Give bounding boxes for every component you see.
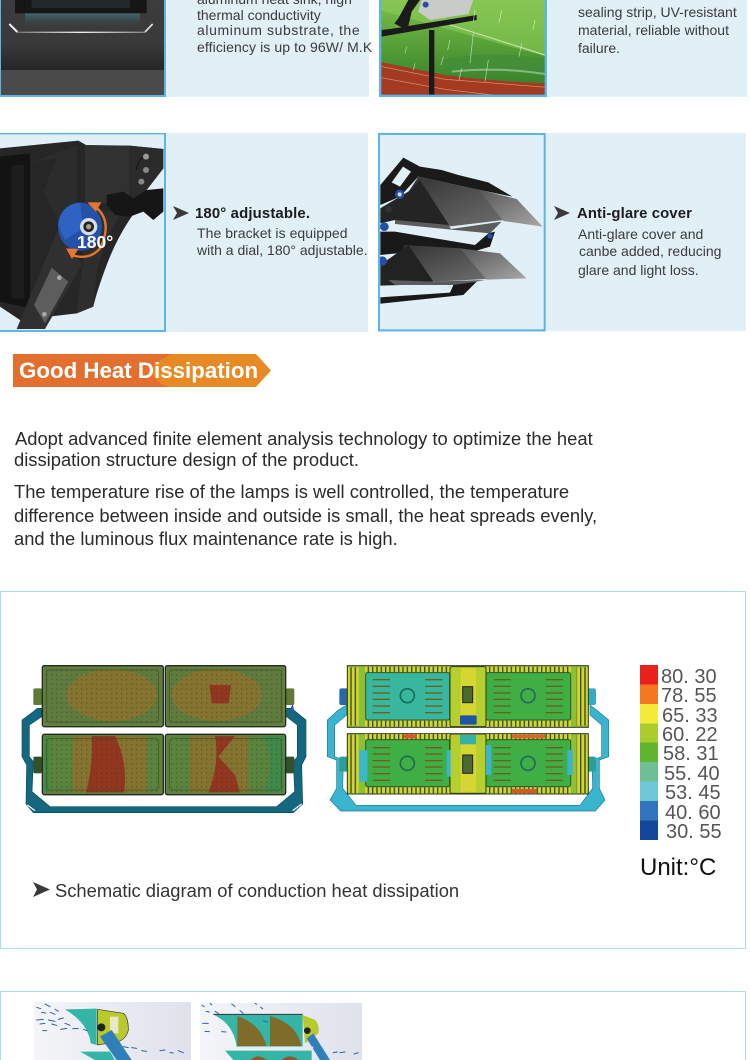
legend unit: Unit:°C [640,854,716,881]
text block: temperature rise: difference between inside and outside is small, the heat spreads evenly, [14,505,597,526]
image: airflow side view left [34,1002,191,1060]
legend: temperature scale: 78. 55 [661,685,717,707]
text background: anti-glare [544,133,746,331]
arrow: adjustable [173,206,189,220]
legend: temperature scale: 80. 30 [661,666,717,688]
text background: adjustable [165,133,368,332]
text: heat sink description: efficiency is up to 96W/ M.K. [197,39,372,55]
arrow: schematic caption [33,882,50,897]
text: waterproof description: sealing strip, UV-resistant [578,4,737,20]
panel: airflow simulation [0,991,746,1060]
text block: finite element analysis: Adopt advanced finite element analysis technology to optimize the heat [15,428,593,449]
legend color bar [640,665,658,840]
panel: heat sink feature [0,0,372,97]
heading banner: good heat dissipation [13,354,271,387]
panel: anti-glare cover [378,133,746,332]
banner title: Good Heat Dissipation [19,358,258,383]
panel: thermal simulation [0,591,746,949]
caption: schematic diagram: Schematic diagram of conduction heat dissipation [55,880,459,901]
text block: temperature rise [14,481,597,549]
text: heat sink description: thermal conductivity [197,7,321,23]
text: heat sink description [197,0,372,55]
image: lamp with glare shields [378,133,546,332]
panel: 180 degree adjustable [0,133,368,332]
label: 180 degrees on image: 180° [77,232,113,252]
text block: temperature rise: The temperature rise of the lamps is well controlled, the temperature [14,481,569,502]
text: heat sink description: aluminum substrate, the [197,22,360,38]
text block: temperature rise: and the luminous flux maintenance rate is high. [14,528,398,549]
image: bracket dial [0,133,166,332]
heading: 180 adjustable: 180° adjustable. [195,206,310,222]
text: anti-glare description [578,226,721,278]
heading: anti-glare cover: Anti-glare cover [577,206,692,222]
image: stadium in rain [379,0,547,97]
text block: finite element analysis: dissipation structure design of the product. [14,449,359,470]
text: anti-glare description: glare and light loss. [578,262,699,278]
text: anti-glare description: canbe added, reducing [579,243,721,259]
panel: waterproof feature [379,0,747,97]
text: waterproof description: material, reliable without [578,22,729,38]
text block: finite element analysis [14,428,593,470]
text: anti-glare description: Anti-glare cover and [578,226,703,242]
text: waterproof description [578,4,737,56]
chart: outer surface thermal map [22,665,306,813]
text background: waterproof [546,0,747,97]
legend: temperature scale: 30. 55 [666,821,722,843]
image: airflow side view right [200,1003,362,1060]
legend: temperature scale: 40. 60 [665,802,721,824]
legend: temperature scale [640,665,722,843]
legend: temperature scale: 60. 22 [662,724,718,746]
text: waterproof description: failure. [578,40,620,56]
text: adjustable description: The bracket is equipped [197,225,348,241]
text: adjustable description [197,225,368,258]
chart: inner structure thermal map [327,665,609,812]
arrow: anti-glare [554,206,570,220]
legend: temperature scale: 58. 31 [663,743,719,765]
legend: temperature scale: 53. 45 [665,782,721,804]
legend: temperature scale: 65. 33 [662,705,718,727]
image: lamp underside [0,0,166,97]
text background: heat sink [166,0,369,97]
text: adjustable description: with a dial, 180° adjustable. [197,242,368,258]
legend: temperature scale: 55. 40 [664,763,720,785]
